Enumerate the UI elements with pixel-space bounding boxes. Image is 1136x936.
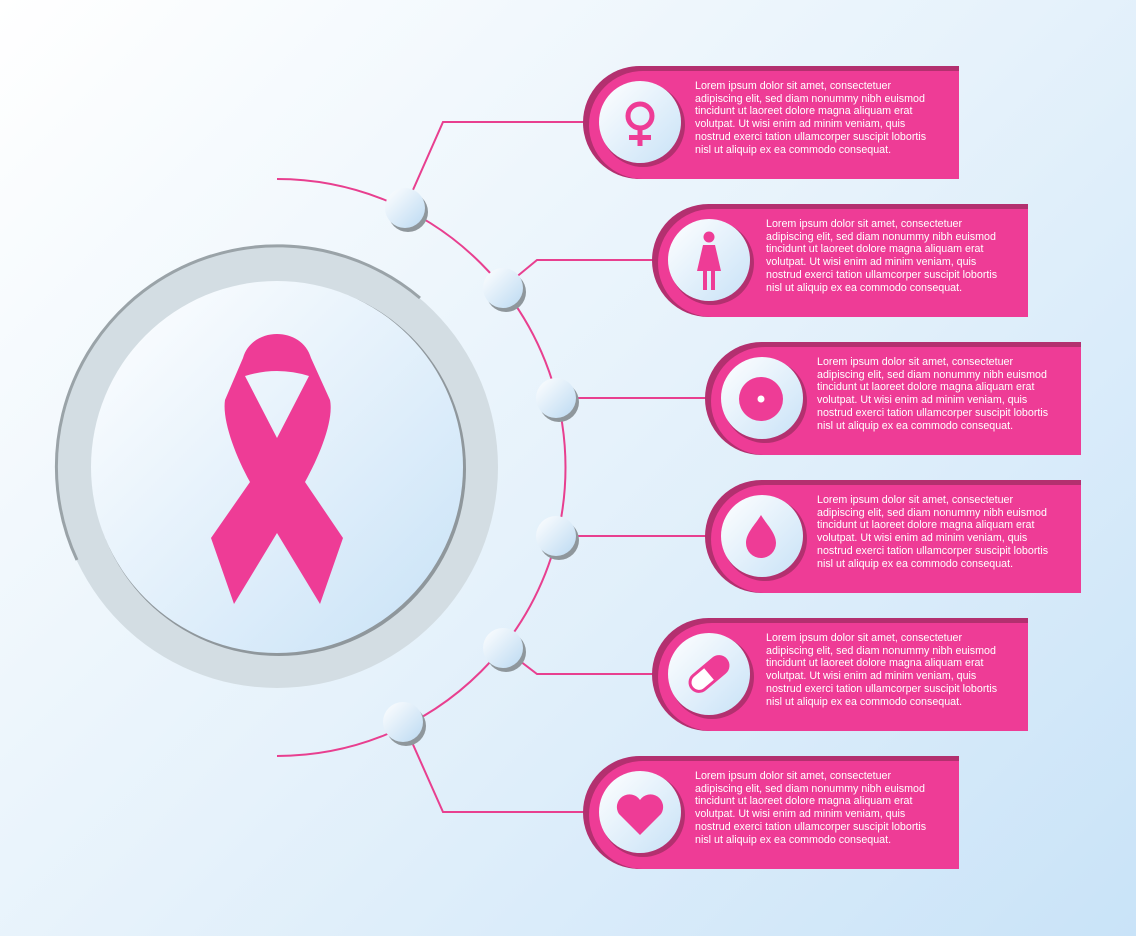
card 4: drop: tincidunt ut laoreet dolore magna aliquam erat — [817, 519, 1034, 531]
card 1: female symbol: nostrud exerci tation ullamcorper suscipit lobortis — [695, 131, 926, 143]
card 5: pill: adipiscing elit, sed diam nonummy nibh euismod — [766, 645, 996, 657]
card 6: heart: adipiscing elit, sed diam nonummy nibh euismod — [695, 783, 925, 795]
card 6: heart: Lorem ipsum dolor sit amet, consectetuer — [695, 770, 891, 782]
card 2: woman: adipiscing elit, sed diam nonummy nibh euismod — [766, 231, 996, 243]
card 2: woman — [652, 204, 1028, 317]
card 1: female symbol: nisl ut aliquip ex ea commodo consequat. — [695, 144, 891, 156]
card 3: breast: nostrud exerci tation ullamcorper suscipit lobortis — [817, 407, 1048, 419]
card 1: female symbol: Lorem ipsum dolor sit amet, consectetuer — [695, 80, 891, 92]
card 4: drop: volutpat. Ut wisi enim ad minim veniam, quis — [817, 532, 1027, 544]
card 2: woman: nisl ut aliquip ex ea commodo consequat. — [766, 282, 962, 294]
card 1: female symbol: tincidunt ut laoreet dolore magna aliquam erat — [695, 105, 912, 117]
card 6: heart: tincidunt ut laoreet dolore magna aliquam erat — [695, 795, 912, 807]
card 5: pill: volutpat. Ut wisi enim ad minim veniam, quis — [766, 670, 976, 682]
card 3: breast: adipiscing elit, sed diam nonummy nibh euismod — [817, 369, 1047, 381]
card 3: breast: nisl ut aliquip ex ea commodo consequat. — [817, 420, 1013, 432]
card 3: breast — [705, 342, 1081, 455]
card 4: drop: nostrud exerci tation ullamcorper suscipit lobortis — [817, 545, 1048, 557]
card 4: drop — [705, 480, 1081, 593]
card 4: drop: Lorem ipsum dolor sit amet, consectetuer — [817, 494, 1013, 506]
card 2: woman: tincidunt ut laoreet dolore magna aliquam erat — [766, 243, 983, 255]
card 4: drop: adipiscing elit, sed diam nonummy nibh euismod — [817, 507, 1047, 519]
connectors — [403, 122, 710, 812]
card 5: pill: nisl ut aliquip ex ea commodo consequat. — [766, 696, 962, 708]
big circle — [56, 246, 498, 688]
card 2: woman: volutpat. Ut wisi enim ad minim veniam, quis — [766, 256, 976, 268]
card 1: female symbol: adipiscing elit, sed diam nonummy nibh euismod — [695, 93, 925, 105]
card 5: pill: tincidunt ut laoreet dolore magna aliquam erat — [766, 657, 983, 669]
card 3: breast: volutpat. Ut wisi enim ad minim veniam, quis — [817, 394, 1027, 406]
card 3: breast: tincidunt ut laoreet dolore magna aliquam erat — [817, 381, 1034, 393]
arc — [277, 179, 566, 756]
ribbon — [211, 334, 343, 604]
card 6: heart: nostrud exerci tation ullamcorper suscipit lobortis — [695, 821, 926, 833]
card 6: heart: nisl ut aliquip ex ea commodo consequat. — [695, 834, 891, 846]
card 1: female symbol: volutpat. Ut wisi enim ad minim veniam, quis — [695, 118, 905, 130]
card 4: drop: nisl ut aliquip ex ea commodo consequat. — [817, 558, 1013, 570]
card 2: woman: Lorem ipsum dolor sit amet, consectetuer — [766, 218, 962, 230]
card 5: pill: Lorem ipsum dolor sit amet, consectetuer — [766, 632, 962, 644]
card 6: heart — [583, 756, 959, 869]
card 5: pill: nostrud exerci tation ullamcorper suscipit lobortis — [766, 683, 997, 695]
card 6: heart: volutpat. Ut wisi enim ad minim veniam, quis — [695, 808, 905, 820]
card 3: breast: Lorem ipsum dolor sit amet, consectetuer — [817, 356, 1013, 368]
card 5: pill — [652, 618, 1028, 731]
card 2: woman: nostrud exerci tation ullamcorper suscipit lobortis — [766, 269, 997, 281]
card 1: female symbol — [583, 66, 959, 179]
nodes — [383, 188, 579, 746]
